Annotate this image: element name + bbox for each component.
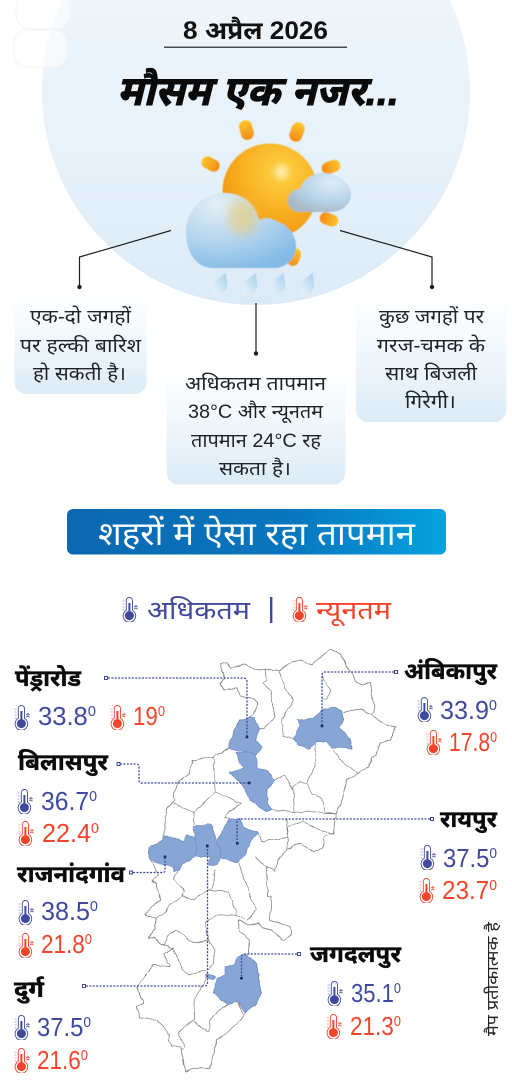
city: Ambikapur: 17.8: [449, 727, 500, 757]
connector: Durg: [82, 844, 209, 988]
connector: Rajnandgaon: [130, 856, 166, 874]
decorative faint icons: [14, 0, 70, 67]
sun disc: [222, 144, 318, 238]
cloud sun glow: [228, 199, 258, 235]
map disclaimer note: मैप प्रतीकात्मक है: [483, 921, 502, 1036]
callout: lightning: गिरेगी।: [405, 390, 456, 413]
city: Rajnandgaon: राजनांदगांव: [17, 861, 126, 887]
city: Jagdalpur: 35.1: [351, 978, 402, 1008]
large cloud: [186, 193, 296, 268]
highlighted district: Pendra Road: [229, 717, 262, 755]
map outline upper: [137, 649, 395, 1072]
city: Ambikapur: 0: [490, 729, 497, 746]
callout: temperature: अधिकतम तापमान: [185, 373, 326, 395]
city: Rajnandgaon: 0: [90, 898, 98, 915]
city: Pendra Road: 33.8: [38, 701, 89, 731]
highlighted district: Raipur: [217, 818, 258, 863]
date heading: 8 अप्रैल 2026: [183, 16, 328, 45]
callout: temperature: [166, 361, 346, 484]
city: Pendra Road: 0: [158, 703, 165, 720]
city: Raipur: 37.5: [443, 843, 494, 873]
legend: न्यूनतम: [316, 595, 391, 626]
banner heading: शहरों में ऐसा रहा तापमान: [98, 514, 416, 552]
city: Pendra Road: [15, 665, 165, 731]
city: Rajnandgaon: [17, 861, 126, 959]
callout: lightning: गरज-चमक के: [377, 334, 485, 357]
city: Rajnandgaon: 21.8: [41, 929, 92, 959]
map of districts: [137, 649, 395, 1072]
icon: sun behind clouds with rain: [186, 119, 351, 294]
city: Durg: 0: [83, 1014, 91, 1031]
small cloud: [288, 173, 351, 212]
highlighted district: Rajnandgaon: [148, 835, 197, 872]
callout: light rain: [14, 288, 146, 394]
city: Ambikapur: 0: [489, 697, 497, 714]
sun rays: [199, 119, 342, 268]
city: Jagdalpur: [310, 941, 402, 1041]
city: Durg: 0: [81, 1047, 88, 1064]
highlighted district: Jagdalpur: [213, 955, 262, 1012]
city: Pendra Road: पेंड्रारोड: [15, 665, 82, 692]
date underline: [164, 47, 347, 48]
city: Raipur: 23.7: [442, 875, 493, 905]
rain drops: [213, 273, 314, 294]
leader line: centre: [254, 303, 258, 356]
city: Ambikapur: 33.9: [440, 695, 491, 725]
city: Jagdalpur: 0: [394, 1013, 401, 1030]
background circle: [42, 0, 470, 305]
callout: light rain: एक-दो जगहों: [30, 305, 132, 328]
legend: [123, 595, 391, 626]
city: Raipur: [420, 806, 498, 905]
city: Raipur: रायपुर: [440, 806, 498, 833]
city: Jagdalpur: जगदलपुर: [310, 941, 402, 968]
highlighted district: Ambikapur: [293, 707, 352, 749]
city: Bilaspur: 22.4: [42, 818, 93, 848]
city: Bilaspur: 0: [89, 788, 97, 805]
connector: Ambikapur: [321, 670, 398, 727]
city: Bilaspur: बिलासपुर: [18, 749, 109, 776]
highlighted district: Durg: [194, 823, 222, 867]
city: Durg: दुर्ग: [14, 976, 45, 1004]
city: Pendra Road: 0: [88, 703, 96, 720]
leader line: right: [340, 230, 434, 289]
banner heading: [67, 509, 446, 554]
city: Bilaspur: 0: [91, 820, 99, 837]
connector: Jagdalpur: [240, 952, 300, 980]
callout: temperature: तापमान 24°C रह: [191, 431, 322, 452]
leader line: left: [77, 230, 171, 289]
city: Bilaspur: 36.7: [41, 786, 92, 816]
city: Jagdalpur: 21.3: [350, 1011, 401, 1041]
city: Durg: 37.5: [37, 1012, 88, 1042]
callout: lightning: साथ बिजली: [385, 363, 478, 385]
connector: Pendra Road: [104, 676, 248, 738]
callout: light rain: पर हल्की बारिश: [20, 334, 142, 357]
callout: temperature: 38°C और न्यूनतम: [188, 401, 324, 424]
callout: lightning: कुछ जगहों पर: [379, 305, 485, 329]
city: Jagdalpur: 0: [394, 980, 401, 997]
city: Pendra Road: 19: [133, 701, 162, 731]
city: Raipur: 0: [489, 877, 497, 894]
callout: temperature: सकता है।: [219, 457, 291, 480]
city: Ambikapur: [404, 658, 498, 757]
callout: lightning: [356, 288, 506, 422]
highlighted district: Bilaspur: [230, 752, 275, 812]
main title: मौसम एक नजर...: [117, 68, 399, 114]
city: Ambikapur: अंबिकापुर: [404, 658, 498, 685]
city: Bilaspur: [18, 749, 109, 848]
connector: Bilaspur: [117, 762, 251, 784]
city: Durg: 21.6: [37, 1045, 88, 1075]
city: Durg: [14, 976, 91, 1075]
city: Raipur: 0: [489, 845, 497, 862]
legend: अधिकतम: [147, 595, 250, 625]
city: Rajnandgaon: 38.5: [41, 896, 92, 926]
connector: Raipur: [236, 818, 434, 845]
city: Rajnandgaon: 0: [85, 931, 92, 948]
callout: light rain: हो सकती है।: [33, 362, 126, 385]
